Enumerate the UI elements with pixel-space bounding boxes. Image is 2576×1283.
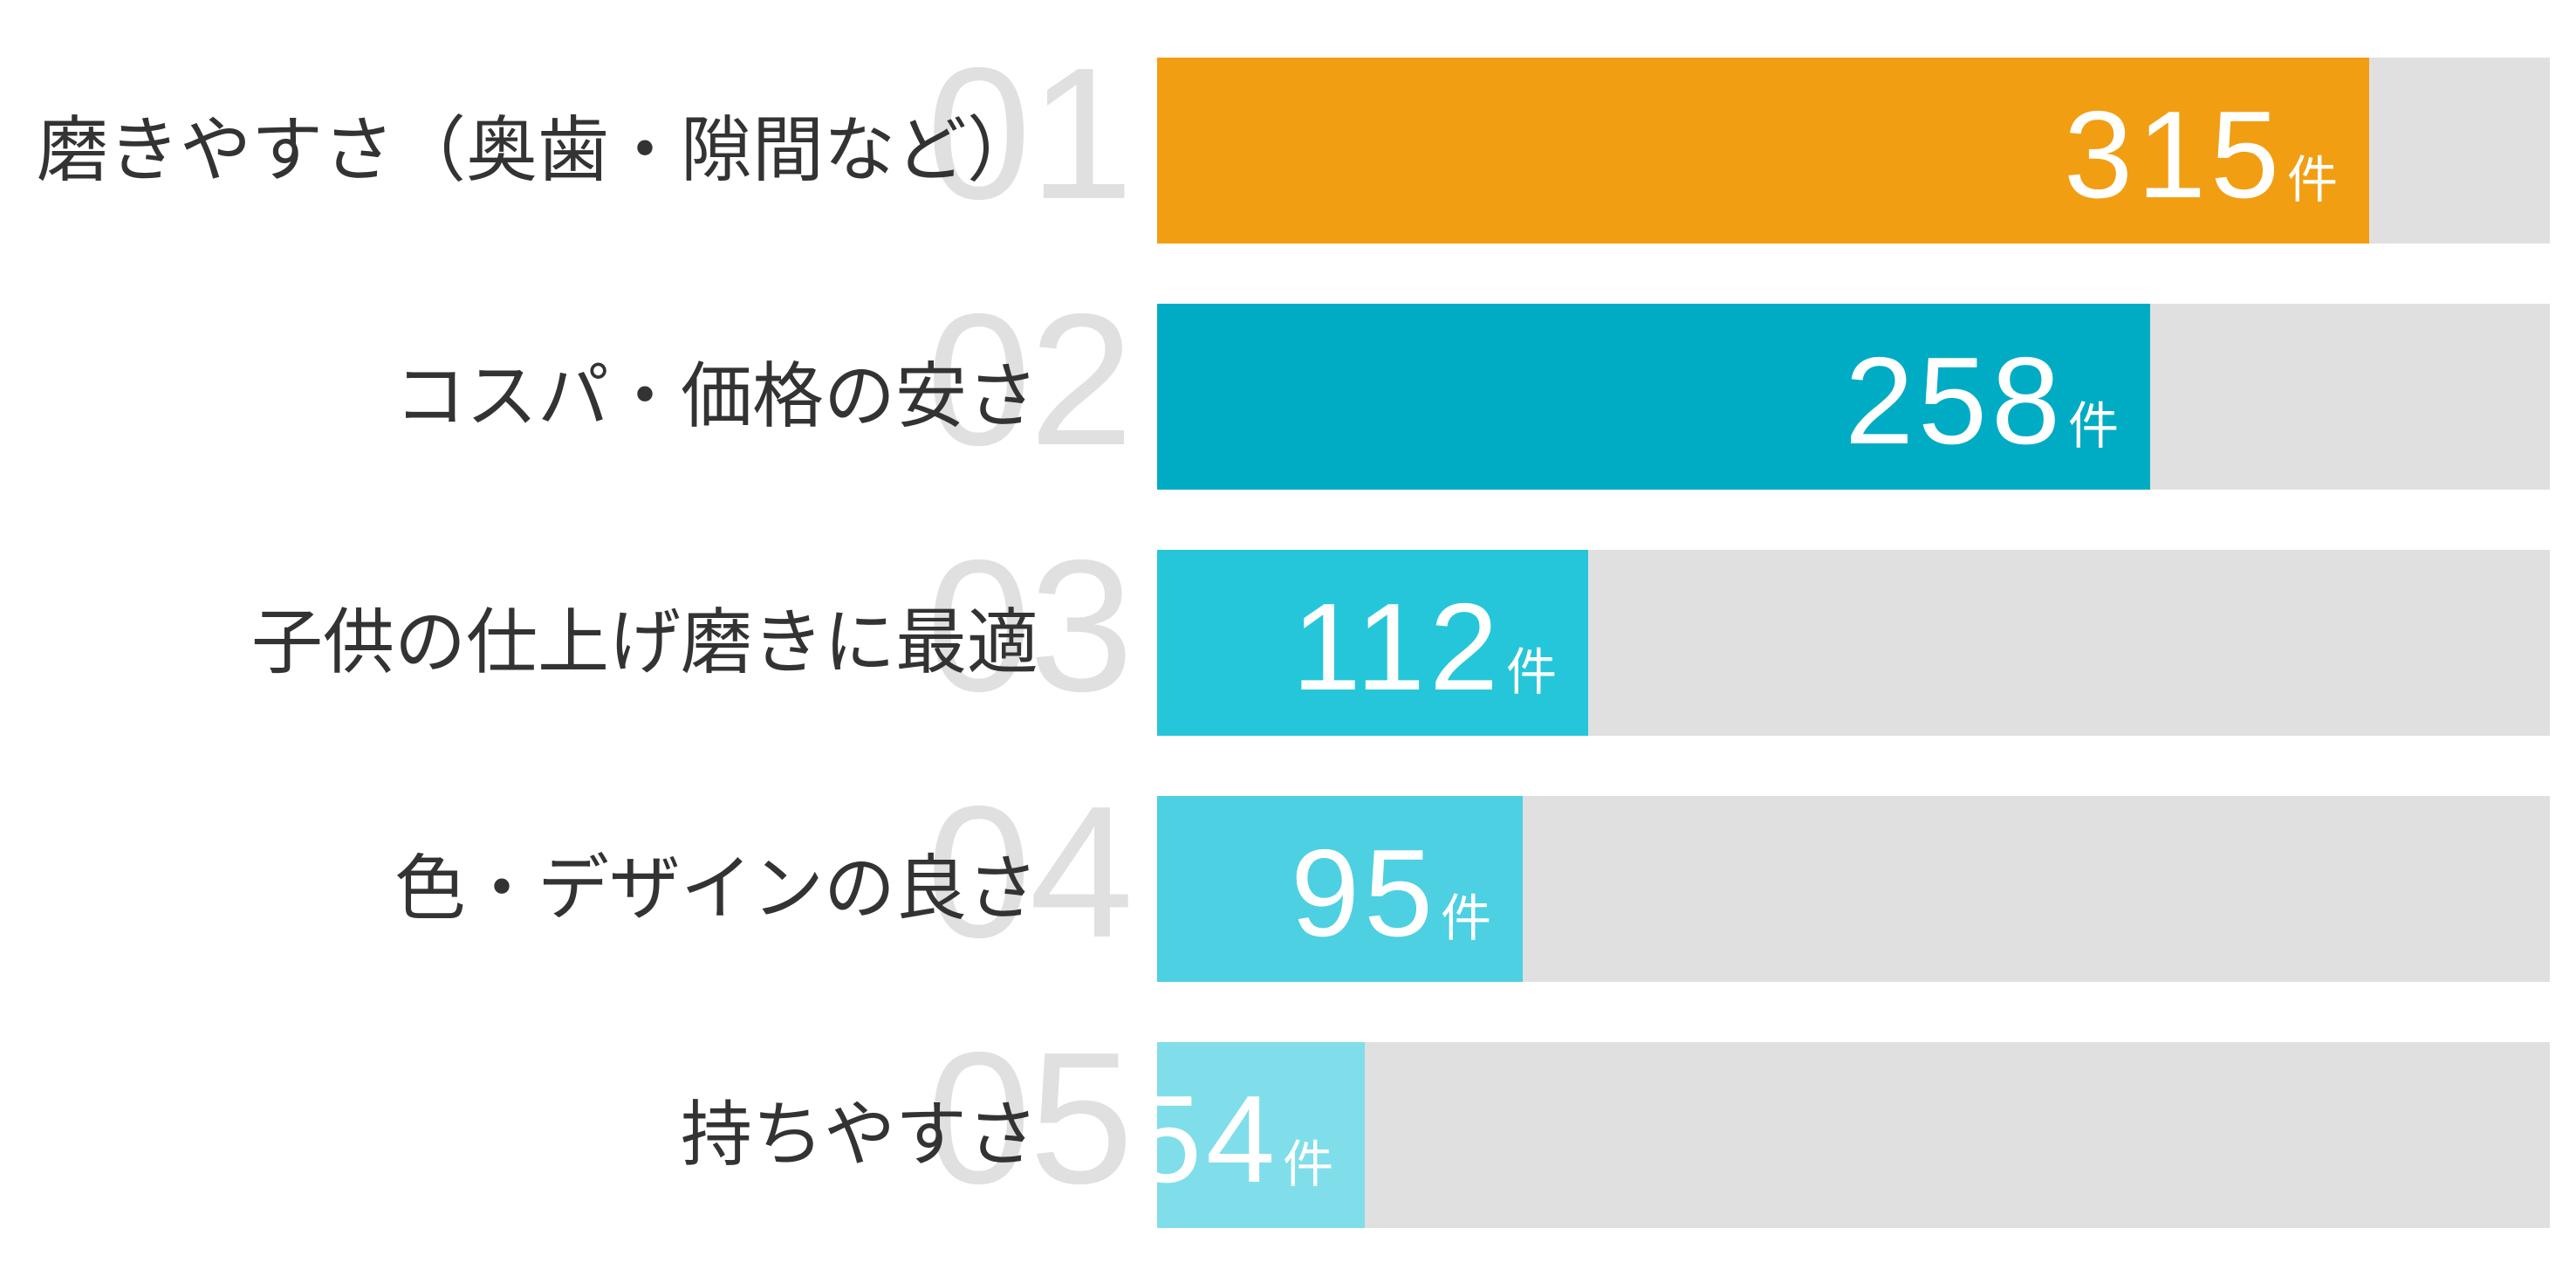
rank number 01: 01	[927, 28, 1132, 238]
row 5	[681, 1012, 2550, 1228]
bar 4: 95件	[1291, 824, 1491, 963]
label 4: 色・デザインの良さ	[394, 849, 1038, 929]
label 5: 持ちやすさ	[681, 1095, 1038, 1175]
label 3: 子供の仕上げ磨きに最適	[251, 603, 1038, 683]
label 1: 磨きやすさ（奥歯・隙間など）	[37, 111, 1038, 190]
row 3	[251, 520, 2550, 736]
row 1	[37, 28, 2550, 244]
bar 2	[1157, 304, 2150, 490]
row 4	[394, 766, 2550, 982]
track 4	[1157, 796, 2550, 982]
rank number 04: 04	[927, 766, 1132, 977]
track 5	[1157, 1042, 2550, 1228]
bar 3: 112件	[1292, 578, 1557, 717]
rank number 02: 02	[927, 274, 1132, 484]
bar 2: 258件	[1845, 332, 2119, 470]
track 3	[1157, 550, 2550, 736]
rank number 05: 05	[927, 1012, 1132, 1223]
label 2: コスパ・価格の安さ	[394, 357, 1038, 436]
bar 1: 315件	[2064, 86, 2338, 224]
bar 3	[1157, 550, 1588, 736]
row 2	[394, 274, 2550, 490]
track 2	[1157, 304, 2550, 490]
bar 1	[1157, 58, 2369, 244]
track 1	[1157, 58, 2550, 244]
bar 4	[1157, 796, 1523, 982]
rank number 03: 03	[927, 520, 1132, 731]
bar 5	[1157, 1042, 1365, 1228]
